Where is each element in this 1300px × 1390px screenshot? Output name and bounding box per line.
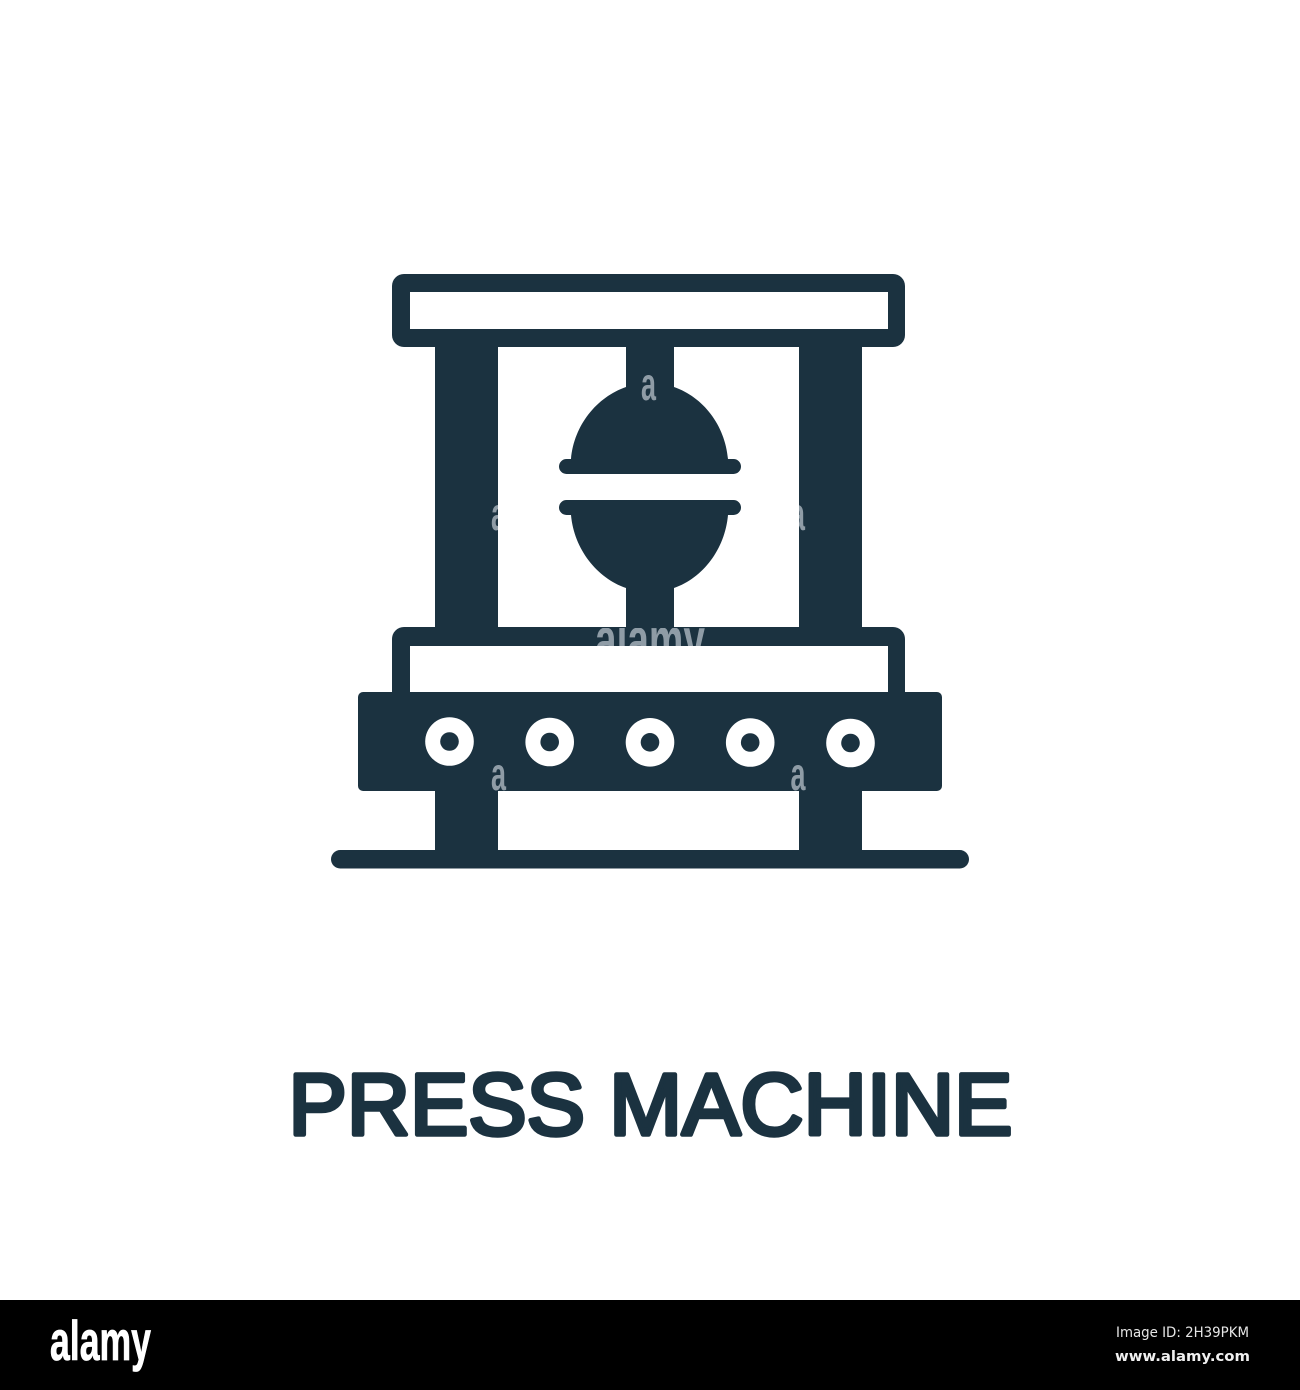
watermark glyphs [491, 358, 806, 800]
footer bar [0, 1300, 1300, 1390]
right column lower [799, 791, 862, 857]
lower press head [559, 500, 741, 628]
watermark: right column: a [790, 488, 805, 540]
lower crossbar [392, 627, 905, 700]
upper press head [559, 347, 741, 474]
left column lower [435, 791, 498, 857]
watermark: stem: a [641, 358, 656, 410]
ground line [331, 850, 969, 868]
left column upper [435, 347, 498, 628]
roller 3 [626, 718, 674, 767]
watermark: belt right: a [790, 748, 806, 800]
roller 5 [826, 719, 875, 767]
conveyor belt with rollers [358, 692, 942, 791]
website: www.alamy.com [1115, 1349, 1250, 1365]
roller 2 [525, 718, 574, 766]
icon: press machine [331, 274, 969, 868]
watermark: left column: a [491, 488, 506, 540]
top crossbar [392, 274, 905, 347]
watermark: belt left: a [491, 748, 506, 800]
footer logo: alamy [50, 1309, 151, 1372]
title: PRESS MACHINE [288, 1056, 1012, 1154]
watermark: center word: alamy [595, 606, 705, 675]
image id: Image ID: 2H39PKM [1116, 1325, 1249, 1341]
right column upper [799, 347, 862, 628]
roller 1 [425, 717, 474, 766]
roller 4 [726, 718, 774, 767]
